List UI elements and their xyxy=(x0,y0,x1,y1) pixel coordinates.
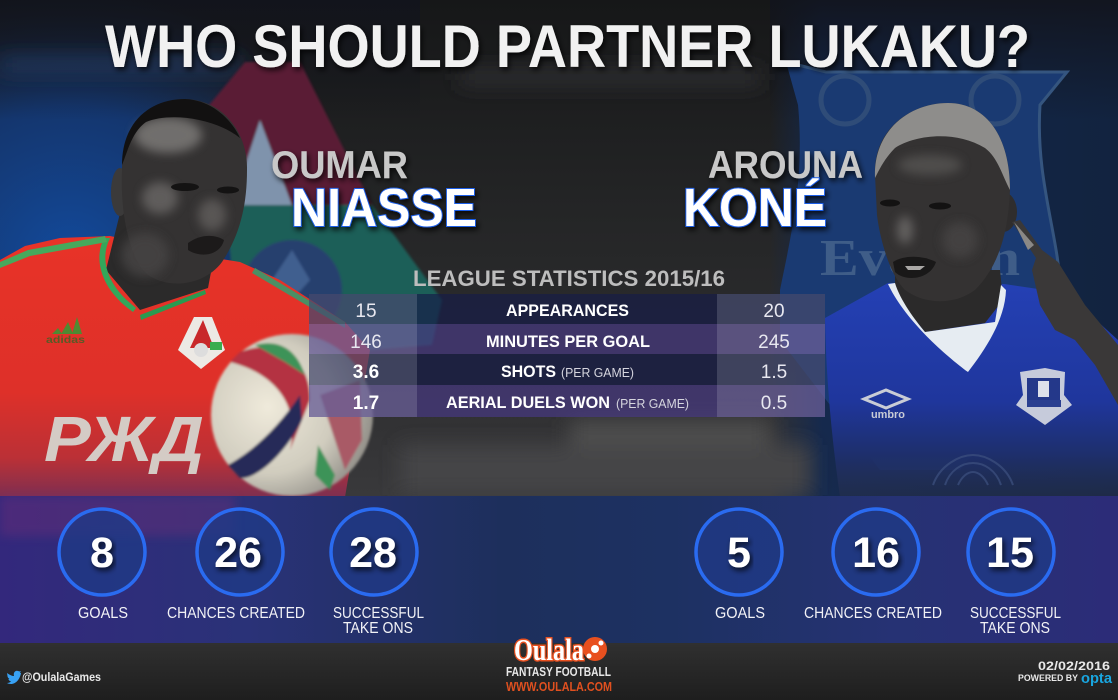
Oulala logo: Oulala xyxy=(514,632,584,667)
Kone stat: successful take ons: 15 xyxy=(986,529,1034,577)
Niasse stat: goals: 8 xyxy=(90,529,114,577)
Niasse stat: chances created xyxy=(167,509,305,622)
statistics table: 20 xyxy=(763,301,785,322)
ear xyxy=(111,168,129,216)
name: Arouna Kone xyxy=(683,144,863,238)
statistics table: 1.7 xyxy=(353,393,379,414)
facial highlights xyxy=(121,117,226,277)
Oulala logo xyxy=(506,632,612,694)
statistics table: (PER GAME) xyxy=(561,365,634,380)
eyes and mouth xyxy=(880,200,900,206)
neck xyxy=(895,270,1003,332)
statistics table: 146 xyxy=(350,332,382,353)
Niasse stat: successful take ons xyxy=(331,509,424,637)
bleached hair xyxy=(875,103,1010,190)
umbro logo: umbro xyxy=(871,409,905,421)
Niasse stat: successful take ons: TAKE ONS xyxy=(343,620,413,637)
Niasse stat: goals xyxy=(59,509,145,622)
statistics table: (PER GAME) xyxy=(616,396,689,411)
Kone stat: goals: GOALS xyxy=(715,605,765,622)
Niasse stat: successful take ons: 28 xyxy=(349,529,397,577)
player: Arouna Kone xyxy=(825,103,1118,497)
ear xyxy=(989,192,1017,232)
shirt xyxy=(0,236,370,497)
Kone stat: successful take ons: TAKE ONS xyxy=(980,620,1050,637)
kit maker xyxy=(46,317,85,346)
name: Oumar Niasse: NIASSE xyxy=(291,178,477,238)
Kone stat: successful take ons xyxy=(968,509,1061,637)
hair xyxy=(122,99,240,165)
eyes and mouth xyxy=(171,183,199,191)
Everton badge watermark: Everton xyxy=(820,230,1020,287)
Kone stat: goals: 5 xyxy=(727,529,751,577)
sponsor: РЖД xyxy=(44,403,204,475)
name: Arouna Kone: AROUNA xyxy=(708,144,863,187)
statistics table: AERIAL DUELS WON xyxy=(446,393,610,412)
Niasse stat: successful take ons: SUCCESSFUL xyxy=(333,605,424,622)
collar emblem on shirt xyxy=(933,455,1013,485)
Kone stat: chances created: 16 xyxy=(852,529,900,577)
heading: league statistics: LEAGUE STATISTICS 2015/16 xyxy=(413,266,725,291)
Lokomotiv badge watermark xyxy=(205,62,442,350)
Niasse stat: chances created: CHANCES CREATED xyxy=(167,605,305,622)
Niasse stat: goals: GOALS xyxy=(78,605,128,622)
statistics table: 15 xyxy=(355,301,377,322)
collar xyxy=(888,283,1006,372)
Kone stat: chances created xyxy=(804,509,942,622)
footer bar xyxy=(0,643,1118,700)
kit maker: adidas xyxy=(46,334,85,346)
twitter handle: @OulalaGames xyxy=(22,670,101,684)
Oulala logo: WWW.OULALA.COM xyxy=(506,680,612,694)
Kone stat: successful take ons: SUCCESSFUL xyxy=(970,605,1061,622)
name: Oumar Niasse xyxy=(271,144,477,238)
facial highlights xyxy=(897,155,978,258)
name: Arouna Kone: KONÉ xyxy=(683,178,827,238)
statistics table: MINUTES PER GOAL xyxy=(486,332,650,351)
club crest xyxy=(178,317,225,369)
name: Oumar Niasse: OUMAR xyxy=(271,144,408,187)
Oulala logo: FANTASY FOOTBALL xyxy=(506,665,611,679)
head xyxy=(122,99,247,284)
Kone stat: chances created: CHANCES CREATED xyxy=(804,605,942,622)
statistics table: 1.5 xyxy=(761,362,787,383)
statistics table: 3.6 xyxy=(353,362,379,383)
title: WHO SHOULD PARTNER LUKAKU? xyxy=(105,13,1030,80)
player: Oumar Niasse xyxy=(0,99,370,497)
statistics table: 245 xyxy=(758,332,790,353)
neck xyxy=(106,205,218,310)
collar trim xyxy=(99,238,136,312)
date and opta credit: opta xyxy=(1081,670,1113,687)
Everton crest xyxy=(1016,368,1072,425)
statistics table: APPEARANCES xyxy=(506,301,629,320)
statistics table: SHOTS xyxy=(501,362,556,381)
statistics table: 0.5 xyxy=(761,393,787,414)
date and opta credit: 02/02/2016 xyxy=(1038,661,1110,673)
Kone stat: goals xyxy=(696,509,782,622)
umbro logo xyxy=(864,390,908,421)
head xyxy=(875,103,1010,301)
raised hand xyxy=(1012,220,1118,405)
date and opta credit xyxy=(1018,661,1113,687)
shirt xyxy=(825,283,1118,497)
match ball xyxy=(211,334,373,496)
Everton badge watermark xyxy=(780,62,1067,470)
shoulder stripes xyxy=(0,236,107,268)
statistics table xyxy=(309,294,825,417)
bottom statistics band xyxy=(0,496,1118,643)
Niasse stat: chances created: 26 xyxy=(214,529,262,577)
date and opta credit: POWERED BY xyxy=(1018,673,1079,684)
